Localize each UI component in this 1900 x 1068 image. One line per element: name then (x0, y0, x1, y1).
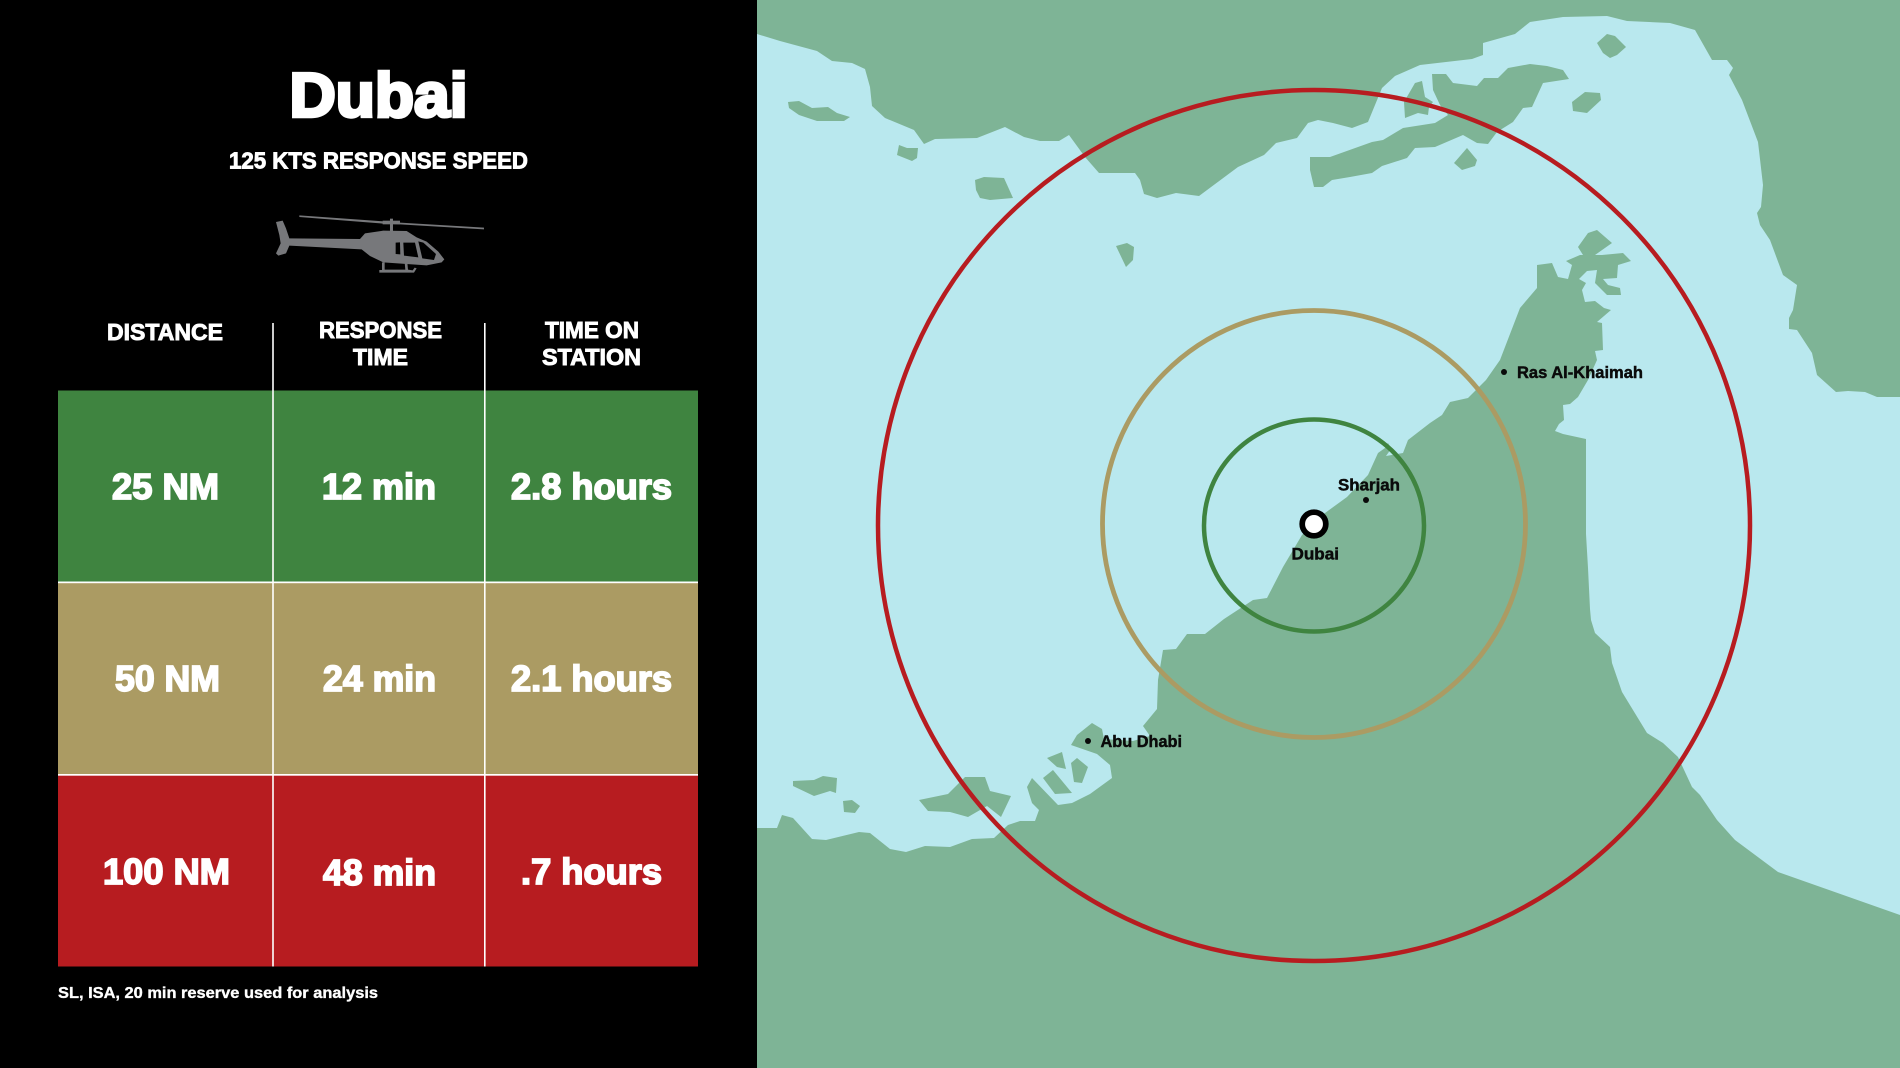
table row: 50 NM: 2.1 hours (511, 658, 672, 699)
table row: 100 NM: 48 min (323, 852, 436, 893)
range ring: 50 NM (1102, 310, 1526, 738)
label: Sharjah (1338, 476, 1400, 503)
table row: 100 NM: .7 hours (521, 851, 662, 892)
column heading: distance: DISTANCE (107, 319, 223, 345)
panel: data (0, 0, 757, 1068)
table row: 100 NM (58, 776, 698, 966)
column heading: response time (319, 317, 442, 370)
label: Abu Dhabi: Abu Dhabi (1100, 733, 1182, 751)
label: Sharjah: Sharjah (1338, 476, 1400, 494)
marker: Dubai (1302, 512, 1326, 536)
table row: 100 NM: 100 NM (103, 851, 230, 892)
column heading: time on station (542, 317, 641, 370)
land: southern islands (793, 752, 1088, 817)
land: northern coast (757, 0, 1900, 397)
footnote: SL, ISA, 20 min reserve used for analysis (58, 985, 378, 1002)
label: Dubai: Dubai (1292, 546, 1339, 564)
column heading: response time: TIME (353, 344, 408, 370)
title: Dubai (290, 62, 468, 130)
table row: 25 NM: 12 min (322, 466, 436, 507)
column heading: response time: RESPONSE (319, 317, 442, 343)
column heading: time on station: STATION (542, 344, 641, 370)
subtitle: 125 KTS RESPONSE SPEED (229, 148, 528, 174)
table row: 25 NM (58, 390, 698, 582)
table row: 50 NM: 24 min (323, 658, 436, 699)
range ring: 100 NM (878, 90, 1750, 961)
icon: helicopter (276, 215, 484, 273)
land: Qeshm island (1310, 64, 1569, 187)
panel: map (757, 0, 1900, 1068)
land: UAE and Oman peninsula (757, 230, 1900, 1068)
land: northern islands (788, 34, 1626, 267)
sea background (757, 0, 1900, 1068)
table row: 25 NM: 25 NM (112, 466, 219, 507)
range ring: 25 NM (1204, 420, 1424, 632)
column heading: time on station: TIME ON (545, 317, 639, 343)
label: Ras Al-Khaimah: Ras Al-Khaimah (1517, 364, 1643, 382)
table row: 50 NM (58, 583, 698, 774)
table row: 50 NM: 50 NM (115, 658, 220, 699)
table row: 25 NM: 2.8 hours (511, 466, 672, 507)
